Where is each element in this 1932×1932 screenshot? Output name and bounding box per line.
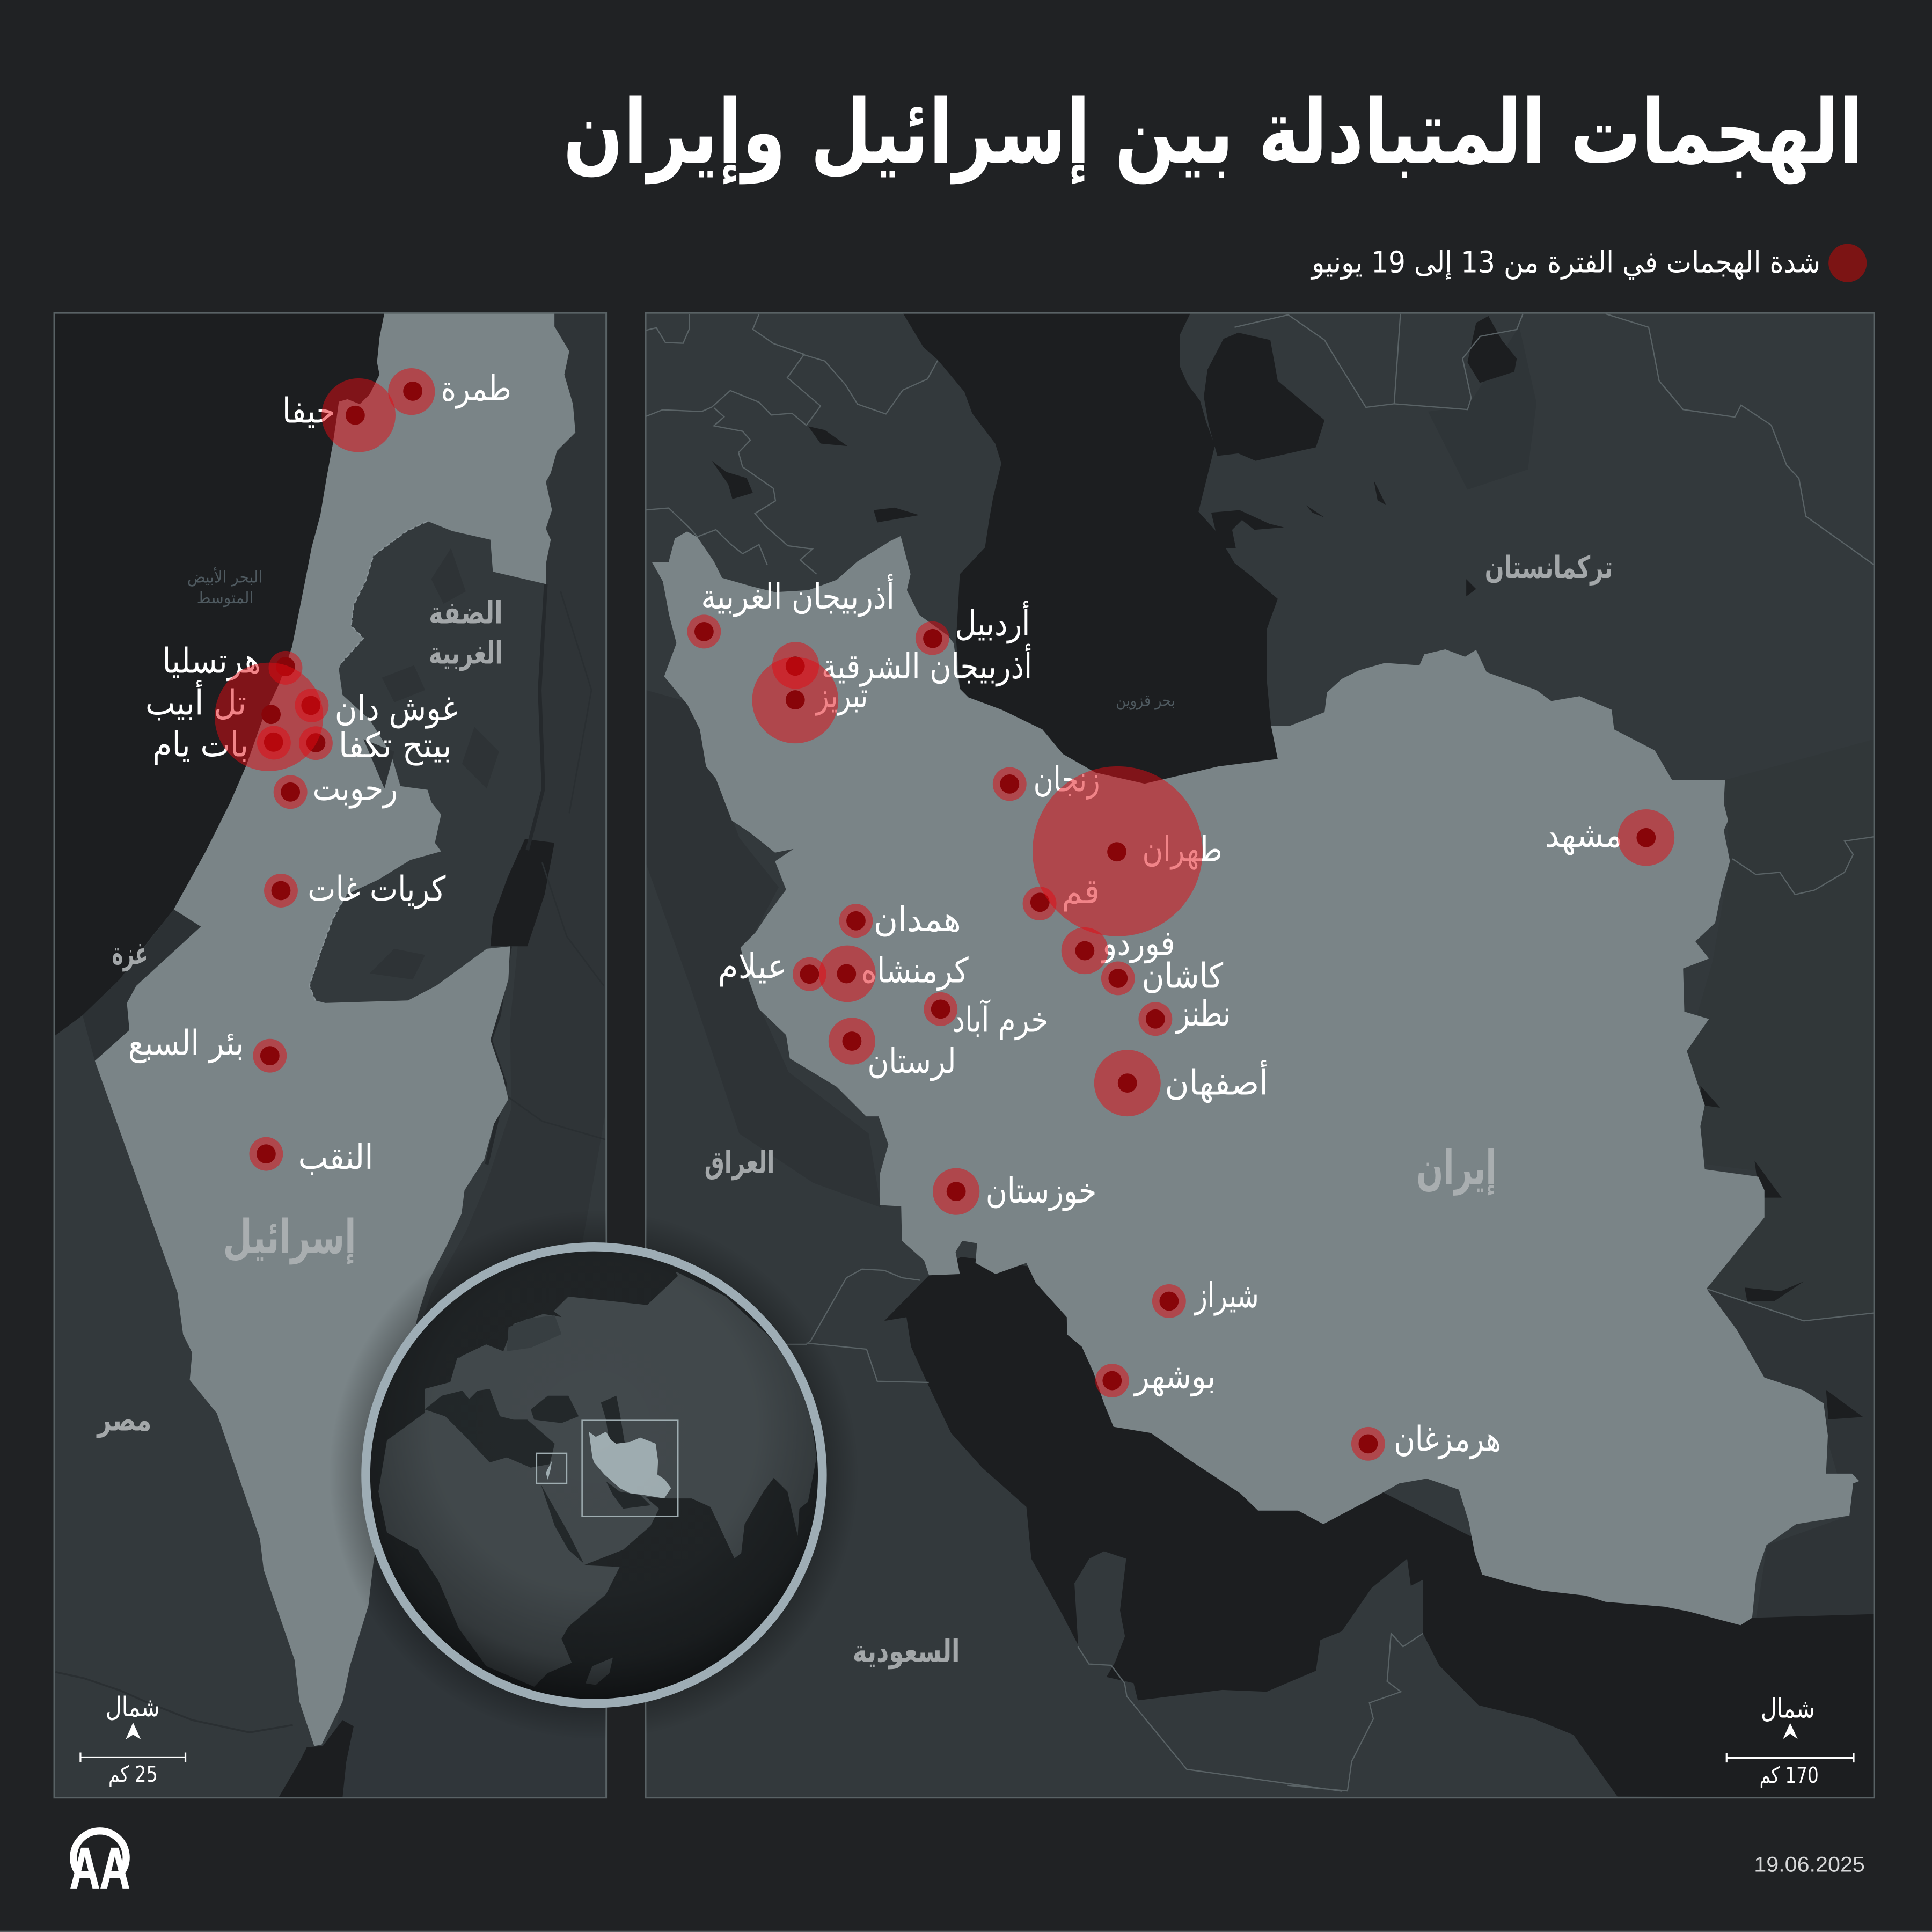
legend — [1310, 244, 1867, 282]
globe: Iran — [589, 1432, 671, 1498]
marker: East Azerbaijan — [772, 642, 819, 689]
country label: Turkmenistan: تركمانستان — [1485, 550, 1613, 586]
panel frame: Iran map — [646, 313, 1874, 1798]
map base: Iran and neighbours — [646, 313, 1875, 1798]
scale bar: Iran map: 170 كم — [1760, 1762, 1819, 1788]
scale bar: Israel map — [80, 1752, 186, 1787]
marker: Tehran — [1033, 766, 1203, 936]
logo: AA — [70, 1831, 130, 1900]
country borders — [646, 314, 1875, 1791]
marker: Khorramabad — [924, 992, 957, 1026]
marker: Tabriz — [752, 657, 838, 743]
marker: Zanjan — [993, 767, 1027, 801]
marker: Gush Dan — [295, 689, 328, 722]
region label: West Bank — [429, 595, 503, 671]
locator globe — [366, 1247, 822, 1703]
region label: West Bank: الغربية — [429, 635, 503, 671]
north arrow: Iran map — [1761, 1693, 1815, 1739]
label: Petah Tikva: بيتح تكفا — [339, 726, 452, 766]
country label: Egypt: مصر — [96, 1402, 151, 1438]
panel: Israel map — [54, 313, 606, 1798]
label: Bat Yam: بات يام — [152, 725, 248, 765]
country label: Israel: إسرائيل — [223, 1210, 356, 1265]
country label: Iraq: العراق — [705, 1145, 774, 1181]
label: Hormozgan: هرمزغان — [1394, 1419, 1501, 1459]
region label: Gaza: غزة — [112, 936, 148, 972]
scale bar: Israel map: 25 كم — [108, 1761, 158, 1787]
marker: Kermanshah — [819, 946, 876, 1002]
label: Zanjan: زنجان — [1034, 760, 1100, 800]
label: Herzliya: هرتسليا — [162, 641, 261, 682]
marker: Hormozgan — [1351, 1427, 1385, 1461]
legend marker — [1828, 244, 1867, 282]
sea label: Mediterranean: المتوسط — [197, 589, 253, 608]
region label: West Bank: الضفة — [429, 595, 503, 631]
panel: Iran map — [646, 313, 1875, 1798]
label: Mashhad: مشهد — [1545, 815, 1622, 855]
marker: Rehovot — [274, 775, 308, 809]
label: East Azerbaijan: أذربيجان الشرقية — [822, 643, 1032, 687]
label: Tabriz: تبريز — [815, 676, 868, 716]
globe ring — [366, 1247, 822, 1703]
marker: Qom — [1023, 887, 1057, 920]
marker: Ardabil — [916, 621, 949, 655]
marker: Beersheba — [253, 1039, 287, 1073]
globe shading — [368, 1249, 820, 1701]
marker: Haifa — [321, 378, 396, 452]
marker: Tel Aviv — [215, 663, 323, 771]
map base: Israel and neighbours — [54, 313, 606, 1798]
label: Negev: النقب — [298, 1137, 374, 1177]
label: Gush Dan: غوش دان — [335, 689, 458, 729]
label: Qom: قم — [1062, 872, 1100, 912]
marker: Khuzestan — [933, 1168, 979, 1215]
globe box: Israel — [537, 1453, 567, 1483]
country label: Iran: إيران — [1416, 1140, 1496, 1196]
label: Kashan: كاشان — [1142, 956, 1224, 996]
globe sea — [368, 1249, 820, 1701]
sea label: Mediterranean — [187, 567, 262, 608]
label: Bushehr: بوشهر — [1133, 1356, 1216, 1396]
marker dots: Iran — [694, 622, 1656, 1453]
label: Rehovot: رحوبت — [312, 769, 398, 809]
label: Hamedan: همدان — [874, 899, 961, 940]
Iran shape — [652, 531, 1860, 1625]
marker: Isfahan — [1094, 1050, 1161, 1116]
legend text: شدة الهجمات في الفترة من 13 إلى 19 يونيو — [1310, 245, 1820, 280]
marker: Petah Tikva — [299, 726, 333, 760]
label: Natanz: نطنز — [1175, 994, 1231, 1034]
globe shadow — [329, 1210, 859, 1740]
label: Ardabil: أردبيل — [955, 601, 1030, 644]
date: 19.06.2025 — [1754, 1853, 1865, 1877]
label: Kermanshah: كرمنشاه — [861, 951, 969, 991]
label: Haifa: حيفا — [282, 391, 335, 431]
label: Shiraz: شيراز — [1194, 1276, 1259, 1316]
label: Beersheba: بئر السبع — [128, 1023, 244, 1063]
north arrow: Israel map: شمال — [106, 1691, 160, 1723]
country label: Saudi Arabia: السعودية — [853, 1634, 960, 1670]
label: Khorramabad: خرم آباد — [953, 999, 1049, 1040]
label: Tamra: طمرة — [441, 369, 511, 409]
marker: Kashan — [1101, 962, 1135, 995]
marker: West Azerbaijan — [687, 614, 721, 648]
north arrow: Iran map: شمال — [1761, 1693, 1815, 1724]
label: Ilam: عيلام — [718, 947, 787, 987]
marker: Ilam — [793, 957, 826, 991]
label: Tel Aviv: تل أبيب — [145, 680, 246, 723]
globe: Israel — [546, 1461, 552, 1480]
marker dots: Israel — [257, 382, 422, 1163]
marker: Natanz — [1138, 1002, 1172, 1036]
logo: AA: AA — [70, 1835, 130, 1900]
marker: Herzliya — [269, 651, 302, 685]
marker: Bat Yam — [257, 726, 291, 759]
label: West Azerbaijan: أذربيجان الغربية — [701, 574, 895, 617]
label: Tehran: طهران — [1142, 830, 1223, 870]
label: Khuzestan: خوزستان — [986, 1171, 1096, 1211]
north arrow: Israel map — [106, 1691, 160, 1739]
marker: Mashhad — [1618, 809, 1674, 866]
label: Kiryat Gat: كريات غات — [308, 869, 446, 909]
marker: Negev — [249, 1137, 283, 1171]
marker: Bushehr — [1095, 1364, 1129, 1397]
label: Fordow: فوردو — [1101, 923, 1175, 963]
marker: Kiryat Gat — [264, 874, 298, 908]
sea label: Mediterranean: البحر الأبيض — [187, 567, 262, 587]
marker: Lorestan — [829, 1018, 875, 1065]
panel frame: Israel map — [54, 313, 606, 1798]
marker: Shiraz — [1152, 1284, 1186, 1318]
scale bar: Iran map — [1726, 1753, 1854, 1788]
sea label: Caspian: بحر قزوين — [1116, 692, 1175, 711]
label: Isfahan: أصفهان — [1165, 1059, 1268, 1103]
marker: Hamedan — [839, 904, 873, 938]
globe box: Iran — [582, 1421, 678, 1516]
marker: Fordow — [1062, 927, 1108, 974]
label: Lorestan: لرستان — [867, 1041, 956, 1081]
marker: Tamra — [388, 368, 435, 415]
globe land and seas — [368, 1249, 820, 1701]
